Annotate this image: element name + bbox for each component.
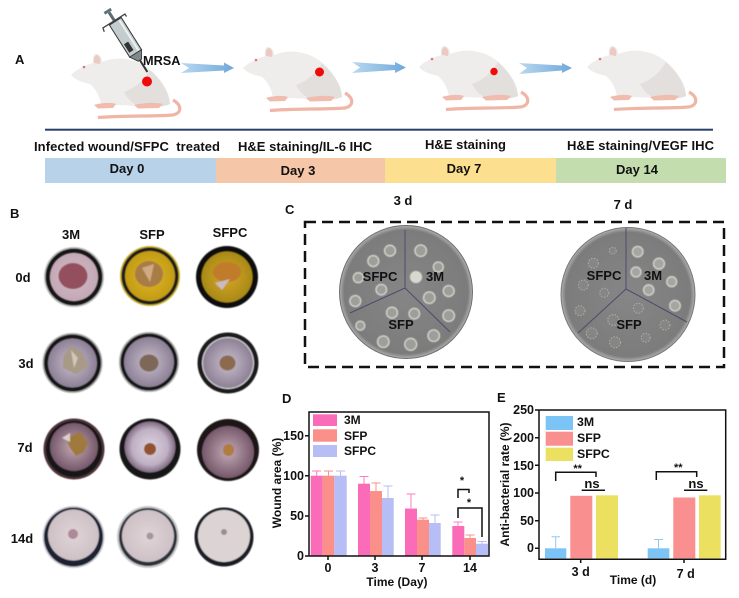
stage label day 3: H&E staining/IL-6 IHC	[238, 139, 373, 154]
y tick labels: 50	[290, 509, 304, 523]
significance brackets: *	[460, 475, 465, 487]
x tick labels: 3 d	[572, 565, 590, 579]
icon: rat day 7	[419, 46, 528, 110]
photo 7d SFPC	[197, 419, 259, 481]
panel letter D: D	[282, 391, 291, 406]
plate 3 d	[340, 226, 472, 358]
plate labels: 3M	[426, 269, 444, 284]
panel letter E: E	[497, 390, 506, 405]
y tick labels: 150	[513, 459, 534, 473]
icon: rat day 3	[243, 47, 352, 110]
legend: SFPC	[344, 444, 376, 458]
photo 3d 3M	[42, 333, 102, 393]
photo 3d SFPC	[198, 332, 258, 394]
row labels: 0d	[15, 270, 31, 285]
significance brackets	[458, 475, 482, 537]
column headings	[62, 225, 248, 242]
timeline bar day 3: Day 3	[281, 163, 315, 178]
timeline bar day 14	[556, 158, 726, 183]
stage label day 0: Infected wound/SFPC treated	[34, 139, 220, 154]
y tick labels: 0	[527, 541, 534, 555]
plate labels	[363, 269, 444, 332]
plate labels: SFP	[388, 317, 414, 332]
photo 0d SFPC	[196, 246, 258, 308]
panel letter B: B	[10, 206, 19, 221]
plate labels: 3M	[644, 268, 662, 283]
photo 7d SFP	[120, 418, 180, 480]
legend	[313, 413, 376, 458]
stage label day 14: H&E staining/VEGF IHC	[567, 138, 715, 153]
row labels: 14d	[11, 531, 33, 546]
axes frame	[535, 410, 726, 563]
x tick labels: 7 d	[677, 567, 695, 581]
plate 7 d	[561, 228, 695, 362]
significance brackets: ns	[688, 476, 704, 491]
x axis title: Time (Day)	[366, 575, 428, 589]
arrow	[352, 62, 406, 73]
plate labels: SFPC	[363, 269, 398, 284]
panel: E anti-bacterial chart	[497, 390, 726, 587]
heading 3 d: 3 d	[394, 193, 412, 208]
y tick labels	[513, 403, 534, 555]
photo 14d SFP	[117, 506, 179, 568]
arrow	[181, 62, 234, 73]
legend: 3M	[577, 415, 594, 429]
legend	[546, 415, 610, 461]
photo 14d SFPC	[194, 508, 254, 566]
legend: 3M	[344, 413, 361, 427]
significance brackets: **	[573, 463, 583, 475]
legend: SFP	[577, 431, 601, 445]
y tick labels: 100	[283, 469, 304, 483]
icon: rat day 0	[71, 54, 180, 118]
timeline bar day 0: Day 0	[110, 161, 144, 176]
x tick labels: 0	[325, 561, 332, 575]
heading 7 d: 7 d	[614, 197, 632, 212]
y tick labels	[283, 429, 304, 563]
panel: C culture plates	[285, 193, 724, 367]
photo 3d SFP	[119, 332, 179, 392]
row labels	[11, 270, 34, 546]
x tick labels	[572, 565, 695, 581]
photo 14d 3M	[42, 506, 104, 568]
row labels: 3d	[18, 356, 34, 371]
panel letter A: A	[15, 52, 25, 67]
bars	[545, 495, 721, 558]
y axis title: Anti-bacterial rate (%)	[498, 422, 512, 547]
panel letter C: C	[285, 202, 295, 217]
panel: B wound photographs	[10, 206, 259, 568]
plate labels: SFPC	[587, 268, 622, 283]
timeline bar day 7	[385, 158, 556, 183]
significance brackets	[556, 462, 707, 491]
x tick labels	[325, 561, 477, 575]
significance brackets: *	[467, 497, 472, 509]
stage label day 7: H&E staining	[425, 137, 506, 152]
photo 0d 3M	[44, 247, 104, 307]
y tick labels: 150	[283, 429, 304, 443]
y tick labels: 0	[297, 549, 304, 563]
y tick labels: 50	[520, 514, 534, 528]
timeline bar day 14: Day 14	[616, 162, 659, 177]
x tick labels: 14	[463, 561, 477, 575]
y tick labels: 250	[513, 403, 534, 417]
column headings: SFPC	[213, 225, 248, 240]
timeline bar day 3	[216, 158, 385, 183]
axes frame	[305, 412, 489, 560]
column headings: 3M	[62, 227, 80, 242]
x tick labels: 3	[372, 561, 379, 575]
timeline bar day 7: Day 7	[447, 161, 481, 176]
x axis title: Time (d)	[610, 573, 656, 587]
timeline bar day 0	[45, 158, 216, 183]
column headings: SFP	[139, 227, 165, 242]
x tick labels: 7	[419, 561, 426, 575]
plate labels	[587, 268, 662, 332]
panel: D wound area chart	[270, 391, 489, 589]
arrow	[519, 63, 572, 74]
significance brackets: **	[674, 462, 683, 474]
photo 7d 3M	[44, 418, 104, 480]
row labels: 7d	[17, 440, 33, 455]
photo grid	[42, 246, 259, 568]
plate labels: SFP	[616, 317, 642, 332]
y tick labels: 200	[513, 431, 534, 445]
legend: SFP	[344, 429, 367, 443]
icon: rat day 14	[587, 46, 696, 110]
legend: SFPC	[577, 447, 610, 461]
y axis title: Wound area (%)	[270, 438, 284, 528]
MRSA label: MRSA	[143, 54, 180, 68]
icon: syringe	[95, 3, 158, 80]
y tick labels: 100	[513, 486, 534, 500]
panel: A timeline	[15, 3, 726, 183]
dashed frame	[305, 222, 724, 367]
photo 0d SFP	[120, 246, 180, 306]
significance brackets: ns	[584, 476, 600, 491]
bars	[311, 471, 488, 556]
